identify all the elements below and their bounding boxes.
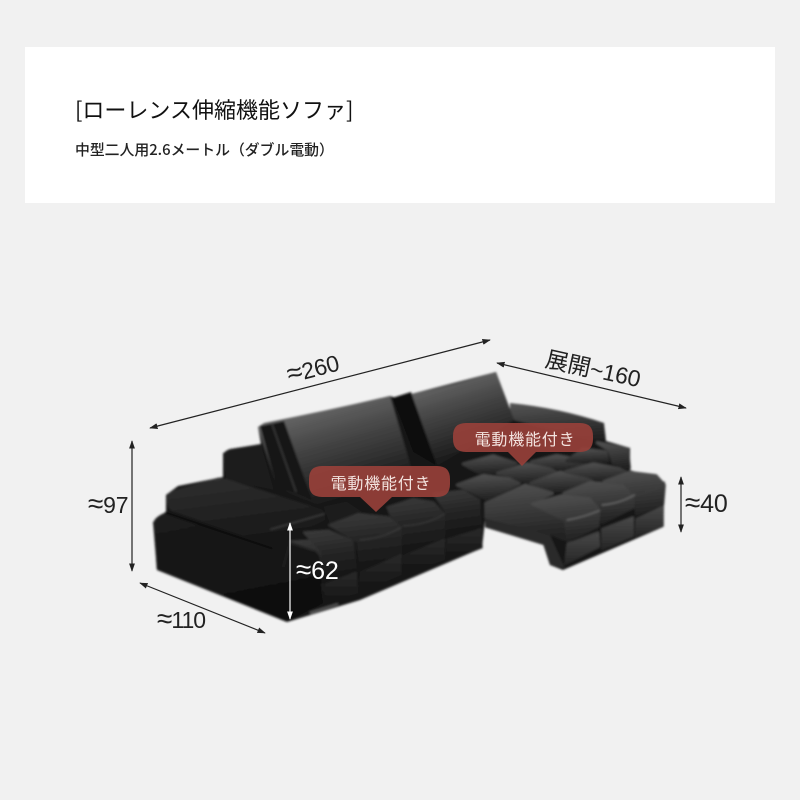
dimension: 97: ≈97 [88,488,128,519]
dimension: extended 160: 展開~160 [543,346,643,392]
arrow: seat height 62 [289,523,291,619]
arrow: height 97 [131,441,133,571]
seam under arm cushion [165,513,273,549]
arrow: width 260 [150,340,490,428]
title: [ローレンス伸縮機能ソファ] [75,93,353,125]
sofa silhouette [153,372,665,622]
arrow: chaise height 40 [680,477,682,532]
arrow: extended 160 [497,363,686,408]
left back cushion [258,396,412,506]
chaise tufted cushions [457,443,664,568]
dimension: 110: ≈110 [157,603,205,634]
left cushion side fold [260,421,312,500]
header panel [25,47,775,203]
right back cushion [392,372,514,466]
label: 電動機能付き right [453,423,593,466]
left back armrest [223,444,274,490]
main seat tufted cushions [290,491,482,617]
chaise underside [485,518,565,568]
subtitle: 中型二人用2.6メートル（ダブル電動） [75,139,334,160]
metal leg [309,603,338,614]
right cushion side fold [392,392,437,466]
dimension: 62: ≈62 [296,554,339,585]
right back armrest [510,403,606,448]
arrow: depth 110 [140,583,265,633]
label: 電動機能付き right: 電動機能付き [475,431,575,449]
left arm cushion [167,478,325,547]
label: 電動機能付き left [309,466,450,512]
sofa illustration [153,372,665,622]
label: 電動機能付き left: 電動機能付き [331,475,431,493]
dimension: 40: ≈40 [685,487,728,518]
left cushion fold highlight [272,424,296,492]
left base [154,478,325,622]
dimension: 260: ≈260 [283,346,342,389]
